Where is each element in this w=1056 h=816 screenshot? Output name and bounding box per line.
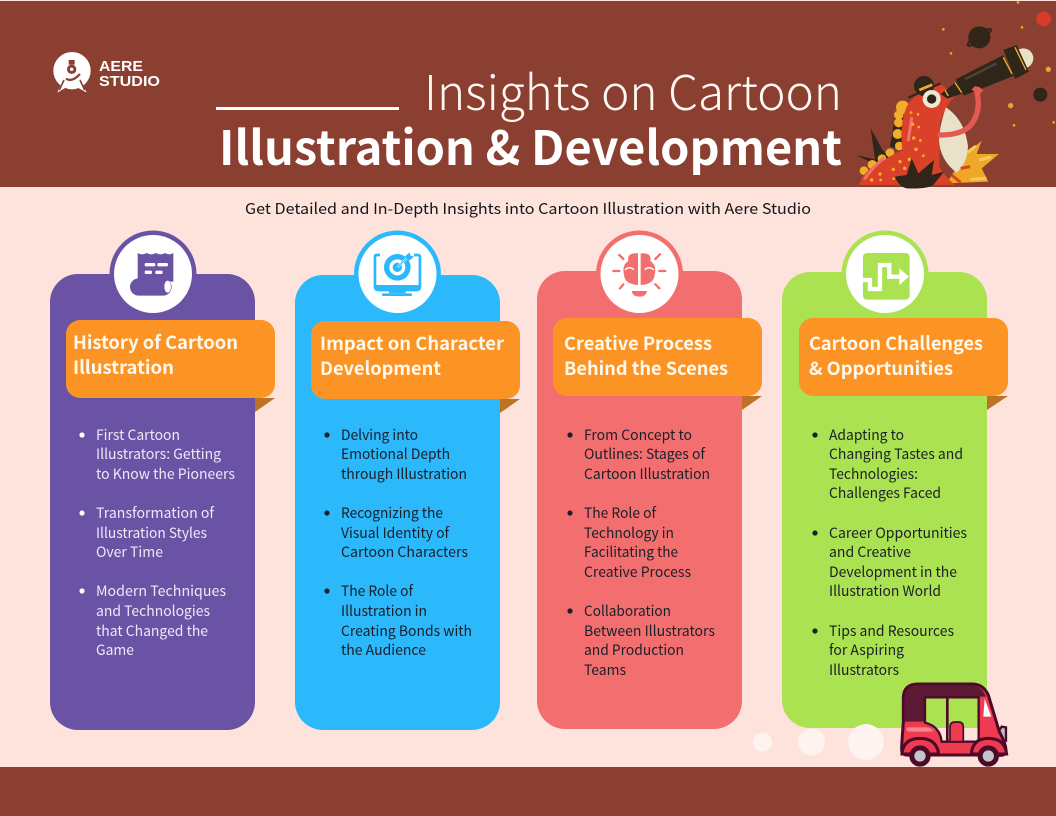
bullet list: Cartoon Characters: [341, 541, 468, 562]
bullet list: Career Opportunities: [829, 522, 967, 543]
bullet list: Tips and Resources: [829, 620, 954, 641]
bullet list: [324, 424, 472, 660]
bullet list: Development in the: [829, 561, 957, 582]
logo: Aere Studio: AERE: [99, 58, 143, 75]
bullet list: Illustration Styles: [96, 522, 207, 543]
footer band: [0, 767, 1056, 816]
bullet list: From Concept to: [584, 424, 692, 445]
icon: monitor with target: [354, 230, 441, 318]
bullet list: that Changed the: [96, 620, 208, 641]
bullet list: Changing Tastes and: [829, 443, 963, 464]
heading banner: Illustration: [73, 354, 174, 380]
bullet list: for Aspiring: [829, 639, 904, 660]
bullet list: Collaboration: [584, 600, 671, 621]
bullet list: The Role of: [584, 502, 657, 523]
heading banner: History of Cartoon: [73, 329, 238, 355]
panel: Cartoon Challenges and Opportunities: [782, 230, 1008, 728]
panel: Impact on Character Development: [295, 230, 520, 730]
icon: path arrow: [842, 230, 928, 318]
subtitle: Get Detailed and In-Depth Insights into Cartoon Illustration with Aere Studio: [245, 198, 811, 219]
heading banner: [553, 318, 762, 410]
bullet list: through Illustration: [341, 463, 467, 484]
bullet list: The Role of: [341, 580, 414, 601]
heading banner: Creative Process: [564, 330, 712, 356]
panel: Creative Process Behind the Scenes: [537, 230, 762, 729]
bullet list: and Technologies: [96, 600, 210, 621]
bullet list: [567, 424, 715, 680]
bullet list: Facilitating the: [584, 541, 678, 562]
bullet list: Between Illustrators: [584, 620, 715, 641]
bullet list: Modern Techniques: [96, 580, 226, 601]
illustration: red auto rickshaw: [902, 684, 1007, 767]
illustration: dinosaur with telescope: [856, 1, 1055, 189]
bullet list: Adapting to: [829, 424, 904, 445]
logo: Aere Studio: STUDIO: [99, 73, 160, 90]
bullet list: Illustration World: [829, 580, 941, 601]
bullet list: to Know the Pioneers: [96, 463, 235, 484]
bullet list: Creating Bonds with: [341, 620, 472, 641]
exhaust puffs: [753, 724, 884, 760]
bullet list: Cartoon Illustration: [584, 463, 710, 484]
bullet list: Transformation of: [96, 502, 215, 523]
heading banner: Cartoon Challenges: [809, 330, 983, 356]
bullet list: First Cartoon: [96, 424, 180, 445]
bullet list: Illustrators: Getting: [96, 443, 221, 464]
bullet list: Challenges Faced: [829, 482, 941, 503]
heading banner: & Opportunities: [809, 355, 953, 381]
header band: [0, 1, 1056, 187]
bullet list: Delving into: [341, 424, 418, 445]
icon: scroll: [110, 230, 196, 318]
bullet list: Teams: [584, 659, 626, 680]
bullet list: Recognizing the: [341, 502, 443, 523]
bullet list: [79, 424, 235, 660]
heading banner: [311, 321, 520, 413]
bullet list: Game: [96, 639, 134, 660]
bullet list: Visual Identity of: [341, 522, 450, 543]
title: Insights on Cartoon: [424, 54, 842, 124]
bullet list: Technology in: [584, 522, 674, 543]
heading banner: [799, 318, 1008, 410]
icon: brain lightbulb: [596, 230, 683, 318]
heading banner: Development: [320, 355, 441, 381]
heading banner: Behind the Scenes: [564, 355, 728, 381]
heading banner: Impact on Character: [320, 330, 504, 356]
title: [216, 54, 842, 179]
logo: Aere Studio: [53, 52, 160, 93]
bullet list: the Audience: [341, 639, 426, 660]
bullet list: Over Time: [96, 541, 163, 562]
panel: History of Cartoon Illustration: [50, 230, 275, 730]
bullet list: Outlines: Stages of: [584, 443, 706, 464]
bullet list: Emotional Depth: [341, 443, 450, 464]
bullet list: Illustrators: [829, 659, 899, 680]
bullet list: Creative Process: [584, 561, 691, 582]
bullet list: Technologies:: [829, 463, 918, 484]
title: Illustration & Development: [219, 110, 842, 179]
bullet list: [812, 424, 967, 680]
bullet list: and Production: [584, 639, 684, 660]
heading banner: [66, 320, 275, 412]
bullet list: and Creative: [829, 541, 911, 562]
bullet list: Illustration in: [341, 600, 427, 621]
